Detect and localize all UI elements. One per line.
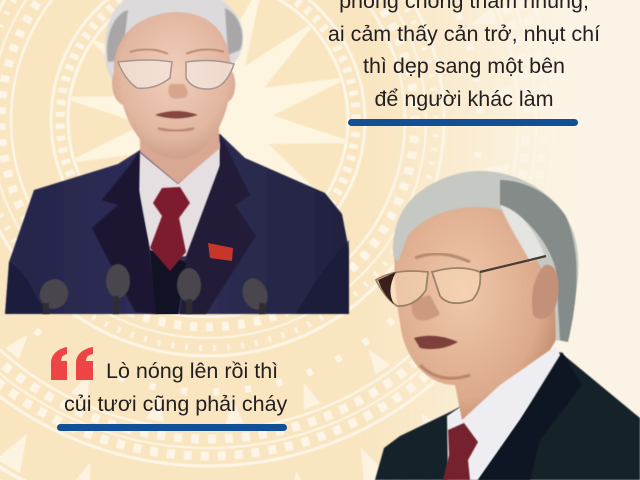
quote text: top: ai cảm thấy cản trở, nhụt chí [328, 22, 600, 46]
icon: red quotation mark [51, 347, 93, 380]
divider: bottom quote underline [57, 424, 287, 431]
quote text: top: để người khác làm [374, 87, 554, 111]
quote text: top: thì dẹp sang một bên [363, 54, 565, 78]
quote text: bottom: Lò nóng lên rồi thì [106, 359, 278, 383]
quote text: bottom: củi tươi cũng phải cháy [64, 392, 287, 416]
divider: top quote underline [348, 119, 578, 126]
quote text: bottom [64, 359, 288, 416]
quote text: top [328, 0, 600, 111]
